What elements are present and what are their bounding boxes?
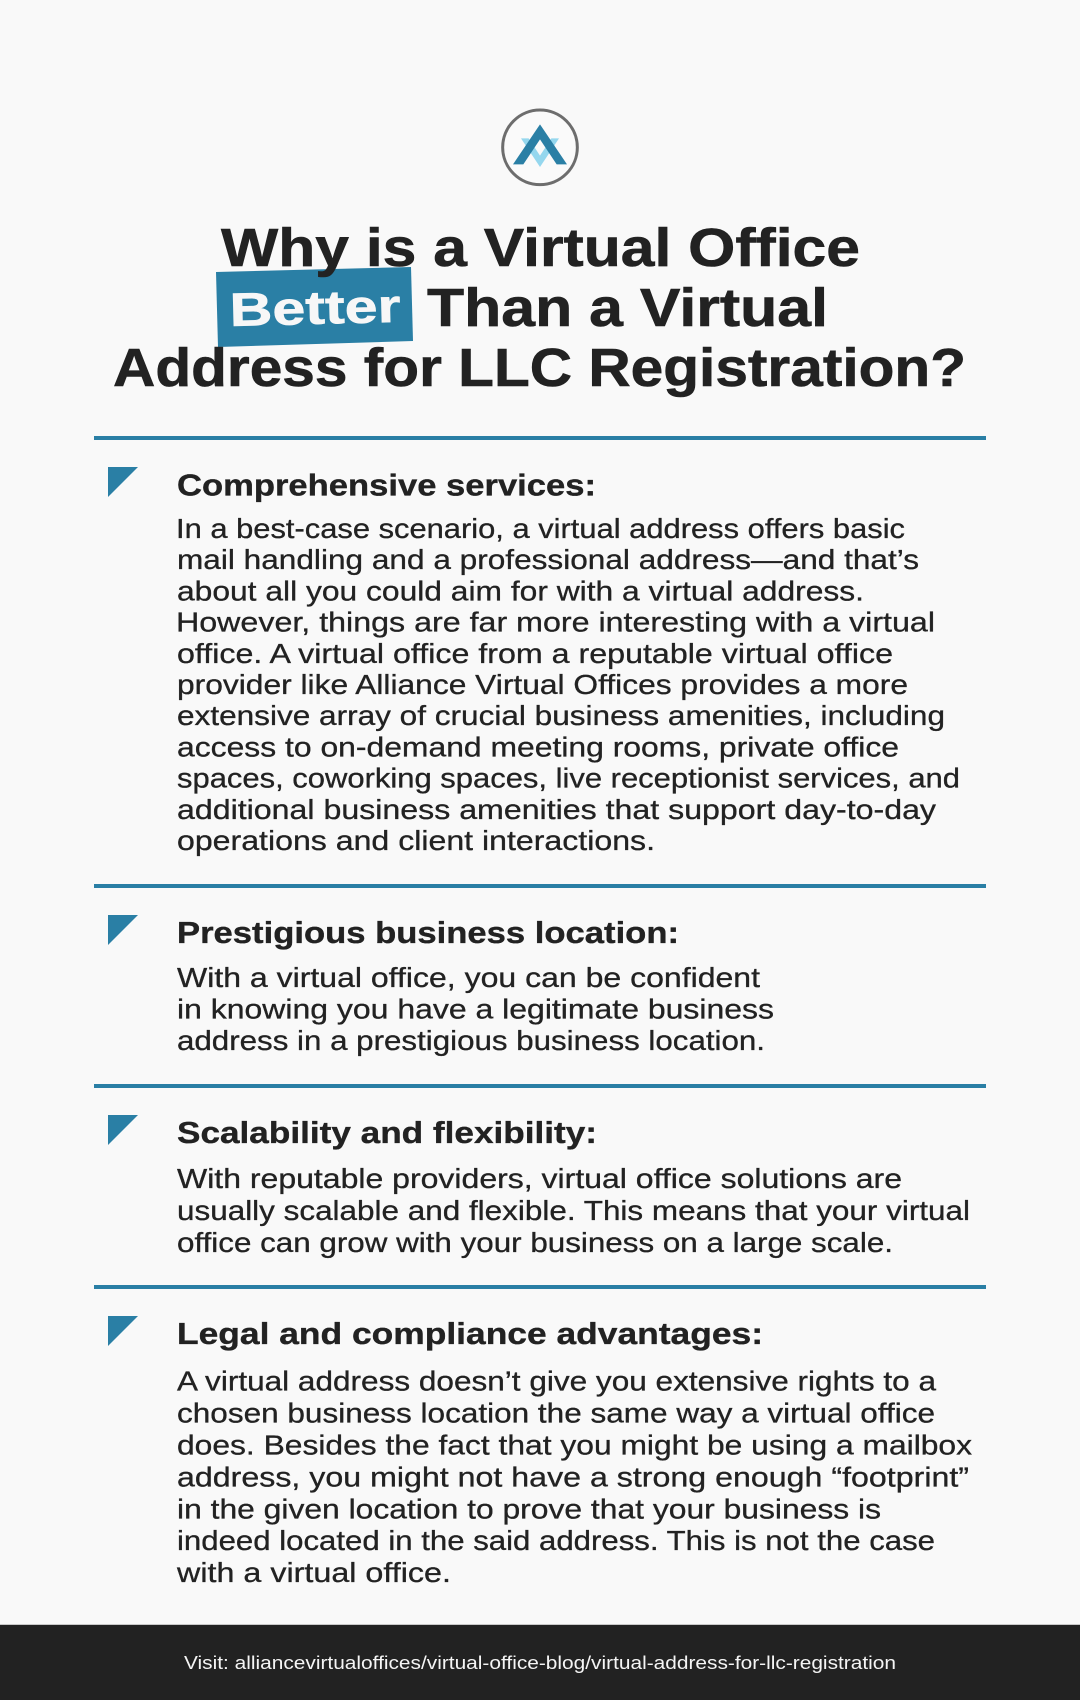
icon: corner triangle bbox=[108, 467, 138, 497]
body text: mail handling and a professional address—and that’s bbox=[177, 544, 919, 575]
title line 2: Than a Virtual bbox=[427, 278, 828, 338]
body text: in the given location to prove that your business is bbox=[177, 1494, 881, 1524]
body text: address in a prestigious business location. bbox=[177, 1025, 765, 1056]
body text: access to on-demand meeting rooms, private office bbox=[177, 731, 899, 762]
footer link text: Visit: alliancevirtualoffices/virtual-office-blog/virtual-address-for-llc-registration bbox=[184, 1653, 896, 1673]
body text: A virtual address doesn’t give you extensive rights to a bbox=[177, 1365, 937, 1396]
body text: spaces, coworking spaces, live receptionist services, and bbox=[177, 763, 960, 794]
body text: usually scalable and flexible. This means that your virtual bbox=[177, 1195, 970, 1226]
body text: With reputable providers, virtual office solutions are bbox=[177, 1163, 902, 1194]
icon: company logo bbox=[503, 110, 577, 185]
icon: corner triangle bbox=[108, 1115, 138, 1145]
title line 3: Address for LLC Registration? bbox=[113, 338, 966, 398]
footer bar bbox=[0, 1624, 1080, 1700]
body text bbox=[177, 962, 774, 1056]
panel: comprehensive services bbox=[94, 436, 986, 856]
body text: office can grow with your business on a large scale. bbox=[177, 1227, 893, 1258]
body text: with a virtual office. bbox=[176, 1557, 451, 1588]
body text: does. Besides the fact that you might be using a mailbox bbox=[177, 1430, 972, 1460]
body text: operations and client interactions. bbox=[177, 825, 655, 856]
panel: legal and compliance advantages bbox=[94, 1285, 986, 1588]
body text: in knowing you have a legitimate business bbox=[177, 994, 774, 1025]
heading: Prestigious business location: bbox=[177, 915, 679, 950]
panel: scalability and flexibility bbox=[94, 1084, 986, 1258]
body text: about all you could aim for with a virtual address. bbox=[177, 575, 864, 606]
body text: additional business amenities that support day-to-day bbox=[177, 794, 936, 825]
body text: office. A virtual office from a reputable virtual office bbox=[177, 638, 893, 669]
title bbox=[113, 218, 966, 398]
icon: corner triangle bbox=[108, 915, 138, 945]
panel: prestigious business location bbox=[94, 884, 986, 1056]
title line 1: Why is a Virtual Office bbox=[221, 218, 860, 278]
body text bbox=[176, 513, 960, 856]
body text: However, things are far more interesting with a virtual bbox=[176, 607, 935, 638]
heading: Scalability and flexibility: bbox=[177, 1115, 597, 1150]
highlighted word: Better bbox=[229, 279, 401, 336]
body text bbox=[177, 1163, 970, 1258]
body text bbox=[176, 1365, 972, 1588]
body text: In a best-case scenario, a virtual address offers basic bbox=[176, 513, 905, 544]
body text: extensive array of crucial business amenities, including bbox=[177, 700, 945, 731]
heading: Legal and compliance advantages: bbox=[177, 1316, 763, 1351]
body text: address, you might not have a strong enough “footprint” bbox=[177, 1462, 969, 1492]
heading: Comprehensive services: bbox=[177, 468, 596, 502]
body text: chosen business location the same way a virtual office bbox=[177, 1398, 935, 1428]
icon: corner triangle bbox=[108, 1316, 138, 1346]
body text: provider like Alliance Virtual Offices provides a more bbox=[177, 669, 908, 700]
body text: With a virtual office, you can be confident bbox=[177, 962, 760, 993]
title highlight box bbox=[216, 267, 413, 347]
body text: indeed located in the said address. This is not the case bbox=[177, 1525, 935, 1556]
